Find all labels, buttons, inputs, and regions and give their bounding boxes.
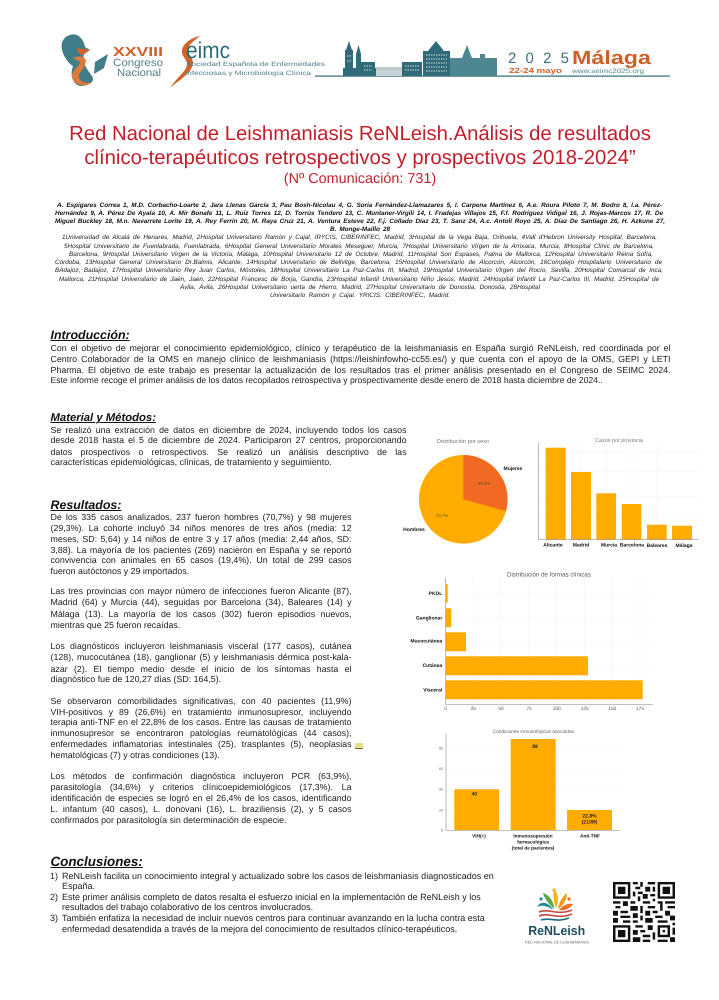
Málaga skyline xyxy=(315,41,670,77)
category labels xyxy=(410,591,443,693)
axis ticks: 20 xyxy=(439,808,443,812)
pie labels: 70.7% xyxy=(436,513,448,518)
text: resultados: diagnóstico fue de 120,27 días (SD: 164,5). xyxy=(50,674,221,684)
text: conclusiones: enfermedad desatendida a través de la mejora del conocimiento de resultados clínico-terapéuticos. xyxy=(62,924,457,934)
text: resultados: VIH-positivos y 89 (26,6%) en tratamiento inmunosupresor, incluyendo xyxy=(50,706,352,716)
congress name: Nacional xyxy=(117,67,161,79)
affiliations: 1Universidad de Alcalá de Henares, Madrid, 2Hospital Universitario Ramón y Cajal, IRYCIS, CIBERINFEC, Madrid, 3Hospital de la Vega Baja, Orihuela, 4Vall d'Hebron University Hospital, Barcelona, xyxy=(62,234,657,241)
text: conclusiones: ReNLeish facilita un conocimiento integral y actualizado sobre los casos de leishmaniasis diagnosticados en xyxy=(62,870,494,880)
logo: ReNLeish xyxy=(525,888,589,944)
text: introducción: Con el objetivo de mejorar el conocimiento epidemiológico, clínico y terapéutico de la leishmaniasis en España surgió ReNLeish, red coordinada por el xyxy=(50,343,670,353)
bar title: Casos por provincia xyxy=(595,438,643,444)
category labels: VIH(+) xyxy=(472,834,486,838)
text: material y métodos: desde 2018 hasta el 5 de diciembre de 2024. Participaron 27 centros, proporcionando xyxy=(50,435,406,445)
SEIMC name xyxy=(185,37,325,77)
authors list: A. Espigares Correa 1, M.D. Corbacho-Loarte 2, Jara Llenas García 3, Pau Bosh-Nicolau 4, G. Soria Fernández-Llamazares 5, I. Carpena Martínez 6, A.e. Roura Piloto 7, M. Bodro 8, I.a. Pérez- xyxy=(57,202,662,209)
axis ticks: 175 xyxy=(636,706,644,712)
text: resultados: Málaga (13). La mayoría de los casos (302) fueron episodios nuevos, xyxy=(50,608,352,618)
authors list: B. Monge-Maillo 28 xyxy=(330,226,390,233)
text: resultados: identificación de especies se logró en el 26,4% de los casos, identificando xyxy=(50,793,352,803)
text: resultados: inmunosupresor se encontraron patologías reumatológicas (44 casos), xyxy=(50,728,352,738)
authors list xyxy=(55,202,665,233)
chart: casos por provincia xyxy=(538,438,699,549)
text: resultados: confirmados por parasitología sin determinación de especie. xyxy=(50,815,286,825)
date and place: 2 0 2 5 xyxy=(508,50,569,67)
text: resultados: Los diagnósticos incluyeron leishmaniasis visceral (177 casos), cutánea xyxy=(50,641,352,651)
authors list: Miguel Buckley 18, M.n. Navarrete Lorite 19, A. Rey Ferrín 20, M. Raya Cruz 21, A. Ventura Esteve 22, F.j. Collado Díaz 23, T. Sanz 24, A.c. Antolí Royo 25, A. Díaz De Santiago 26, H. Azkune 27, xyxy=(55,218,665,225)
axis ticks: 150 xyxy=(608,706,617,712)
province labels: Madrid xyxy=(573,542,589,548)
title: Distribución de formas clínicas xyxy=(507,572,591,578)
province labels: Baleares xyxy=(647,543,668,549)
axis ticks: 100 xyxy=(553,706,561,712)
category labels: Mucocutánea xyxy=(410,638,443,644)
pie labels xyxy=(403,466,523,533)
authors list: Hernández 9, A. Pérez De Ayala 10, A. Mir Bonafe 11, L. Ruiz Torres 12, D. Torrús Tendero 13, C. Muntaner-Virgili 14, I. Fradejas Villajos 15, F.f. Rodríguez Vidigal 16, J. Rojas-Marcos 17, R. De xyxy=(55,210,663,217)
text: conclusiones: resultados del trabajo colaborativo de los centros involucrados. xyxy=(62,902,313,912)
heading: Introducción: Introducción: xyxy=(50,328,130,342)
affiliations: Barcelona, 9Hospital Universitario Virgen de la Victoria, Málaga, 10Hospital Universitario 12 de Octubre, Madrid, 11Hospital Son Espases, Palma de Mallorca, 12Hospital Universitario Reina Sofía, xyxy=(69,250,653,258)
text: material y métodos: datos prospectivos o retrospectivos. Se realizó un análisis descriptivo de las xyxy=(50,446,406,456)
date and place: Málaga xyxy=(572,48,652,69)
province labels xyxy=(543,542,693,549)
text: resultados: convivencia con animales en 65 casos (19,4%). Un total de 299 casos xyxy=(50,555,352,565)
title xyxy=(69,123,651,186)
province labels: Málaga xyxy=(676,543,693,549)
SEIMC name: Sociedad Española de Enfermedades xyxy=(186,61,325,68)
category labels: Ganglionar xyxy=(416,615,442,621)
pie slices xyxy=(419,455,508,544)
text: conclusiones: España. xyxy=(62,881,95,891)
text: introducción: Este informe recoge el primer análisis de los datos recopilados retrospectiva y prospectivamente desde enero de 2018 hasta diciembre de 2024.. xyxy=(50,375,603,385)
pie labels: Mujeres xyxy=(504,466,523,472)
text: material y métodos: características epidemiológicas, clínicas, de tratamiento y seguimiento. xyxy=(50,457,332,467)
category labels: Visceral xyxy=(423,687,443,693)
header banner xyxy=(62,34,670,88)
SEIMC name: eimc xyxy=(186,37,230,63)
text: conclusiones: 3) xyxy=(50,913,58,923)
bars xyxy=(446,584,643,699)
icon: small note xyxy=(355,743,363,749)
axis ticks: 125 xyxy=(581,706,589,712)
title: clínico-terapéuticos retrospectivos y prospectivos 2018-2024” xyxy=(84,147,636,169)
heading: Conclusiones: Conclusiones: xyxy=(50,854,143,869)
axis ticks: 0 xyxy=(441,828,443,832)
value labels: 22,8% xyxy=(582,814,597,820)
category labels: Cutánea xyxy=(423,663,443,669)
date and place: 22-24 mayo xyxy=(509,66,563,75)
axis ticks: 50 xyxy=(498,706,504,712)
bars xyxy=(546,448,692,540)
pie title: Distribución por sexo xyxy=(437,438,489,445)
QR code xyxy=(613,882,675,942)
congress name xyxy=(113,44,163,79)
text: resultados xyxy=(50,512,352,825)
category labels: farmacológica xyxy=(517,840,549,844)
value labels: 40 xyxy=(472,792,477,798)
text: resultados: Madrid (64) y Murcia (44), seguidas por Barcelona (34), Baleares (14) y xyxy=(50,597,352,607)
text: conclusiones: 1) xyxy=(50,870,58,880)
province labels: Alicante xyxy=(543,542,563,548)
text: conclusiones: 2) xyxy=(50,892,58,902)
category labels: Inmunosupresión xyxy=(513,834,553,838)
pie labels: 29.3% xyxy=(478,481,490,486)
logo wordmark: ReNLeish xyxy=(528,923,585,938)
title: Red Nacional de Leishmaniasis ReNLeish.Análisis de resultados xyxy=(69,123,651,145)
text: material y métodos xyxy=(50,424,406,467)
text: introducción xyxy=(50,343,670,385)
date and place xyxy=(508,48,652,75)
category labels: Anti-TNF xyxy=(580,834,600,838)
chart: distribución por sexo xyxy=(403,438,523,544)
axis ticks: 75 xyxy=(526,706,532,712)
heading: Material y Métodos: Material y Métodos: xyxy=(50,412,156,424)
category labels xyxy=(472,834,600,850)
text: resultados: terapia anti-TNF en el 22,8% de los casos. Entre las causas de tratamiento xyxy=(50,717,352,727)
heading: Resultados: Resultados: xyxy=(50,498,121,512)
text: resultados: meses, SD: 5,64) y 14 niños de entre 3 y 17 años (media: 2,44 años, SD: xyxy=(50,534,352,544)
title: (Nº Comunicación: 731) xyxy=(284,170,436,186)
pie labels: Hombres xyxy=(403,527,425,533)
text: resultados: Se observaron comorbilidades significativas, con 40 pacientes (11,9%) xyxy=(50,696,352,706)
congress logo: figure xyxy=(62,34,108,86)
title: Condiciones inmunológicas asociadas xyxy=(493,729,575,735)
value labels xyxy=(472,744,598,826)
text: resultados: fueron autóctonos y 29 importados. xyxy=(50,566,189,576)
affiliations xyxy=(55,234,663,298)
text: resultados: enfermedades inflamatorias intestinales (25), trasplantes (5), neoplasias xyxy=(50,739,352,749)
text: introducción: Centro Colaborador de la OMS en manejo clínico de leishmaniasis (https://leishinfowho-cc55.es/) y que cuenta con el apoyo de la OMS, GEPI y LETI xyxy=(50,354,670,364)
value labels: (21/89) xyxy=(582,820,598,826)
SEIMC logo mark xyxy=(170,36,200,88)
text: resultados: mientras que 25 fueron recaídas. xyxy=(50,620,180,630)
axis ticks: 0 xyxy=(444,706,447,712)
text: resultados: 3,88). La mayoría de los pacientes (269) nacieron en España y se reportó xyxy=(50,544,352,554)
affiliations: Córdoba, 13Hospital General Universitario Dr.Balmis, Alicante, 14Hospital Universitario de Bellvitge, Barcelona, 15Hospital Universitario de Alcorcón, Alcorcón, 16Complejo Hospitalario Universitario de xyxy=(55,259,662,266)
text: conclusiones xyxy=(50,870,494,934)
chart: distribución de formas clínicas xyxy=(410,572,653,712)
axis ticks: 40 xyxy=(439,787,443,791)
value labels: 89 xyxy=(532,744,538,750)
axis ticks xyxy=(444,706,644,712)
text: introducción: Pharma. El objetivo de este trabajo es presentar la actualización de los resultados tras el primer análisis presentado en el Congreso de SEIMC 2024. xyxy=(50,364,670,374)
affiliations: BAdajoz, Badajoz, 17Hospital Universitario Rey Juan Carlos, Móstoles, 18Hospital Universitario La Paz-Carlos III, Madrid, 19Hospital Universitario Virgen del Rocío, Sevilla, 20Hospital Comarcal de Inca, xyxy=(55,267,663,274)
date and place: www.seimc2025.org xyxy=(571,68,645,75)
affiliations: Universitario Ramón y Cajal. YRICIS. CIBERINFEC, Madrid. xyxy=(270,292,450,298)
axis ticks xyxy=(439,746,443,832)
waves xyxy=(539,910,572,920)
text: conclusiones: Este primer análisis completo de datos resalta el esfuerzo inicial en la implementación de ReNLeish y los xyxy=(62,892,481,902)
text: material y métodos: Se realizó una extracción de datos en diciembre de 2024, incluyendo todos los casos xyxy=(50,424,406,434)
province labels: Barcelona xyxy=(620,542,644,548)
text: conclusiones: También enfatiza la necesidad de incluir nuevos centros para continuar avanzando en la lucha contra esta xyxy=(62,913,485,923)
chart: condiciones inmunológicas asociadas xyxy=(439,729,620,850)
province labels: Murcia xyxy=(601,542,617,548)
axis ticks: 80 xyxy=(439,746,443,750)
affiliations: 5Hospital Universitario de Fuenlabrada, Fuenlabrada, 6Hospital General Universitario Morales Meseguer, Murcia, 7Hospital Universitario Virgen de la Arrixaca, Murcia, 8Hospital Clínic de Barcelona, xyxy=(64,242,654,250)
text: resultados: azar (2). El tiempo medio desde el inicio de los síntomas hasta el xyxy=(50,664,352,674)
text: resultados: (29,3%). La cohorte incluyó 34 niños menores de tres años (media: 12 xyxy=(50,523,352,533)
affiliations: Mallorca, 21Hospital Universitario de Jaén, Jaén, 22Hospital Francesc de Borja, Gandía, 23Hospital Infantil Universitario Niño Jesús, Madrid, 24Hospital Infantil La Paz-Carlos III, Madrid, 25Hospital de xyxy=(59,276,659,282)
text: resultados: De los 335 casos analizados, 237 fueron hombres (70,7%) y 98 mujeres xyxy=(50,512,352,522)
text: resultados: hematológicas (7) y otras condiciones (13). xyxy=(50,750,220,760)
category labels: (total de pacientes) xyxy=(512,846,555,850)
category labels: PKDL xyxy=(429,591,442,597)
text: resultados: L. infantum (40 casos), L. donovani (16), L. braziliensis (2), y 5 casos xyxy=(50,804,352,814)
axis ticks: 60 xyxy=(439,767,443,771)
affiliations: Ávila, Ávila, 26Hospital Universitario uerta de Hierro, Madrid, 27Hospital Universitario de Donostia, Donostia, 28Hospital xyxy=(180,284,540,290)
congress name: Congreso xyxy=(113,57,163,69)
axis ticks: 25 xyxy=(471,706,476,712)
congress name: XXVIII xyxy=(113,44,163,59)
text: resultados: parasitología (34,6%) y criterios clínicoepidemiológicos (17,3%). La xyxy=(50,782,352,792)
logo subtitle: RED NACIONAL DE LEISHMANIASIS xyxy=(525,940,589,944)
text: resultados: (128), mucocutánea (18), ganglionar (5) y leishmaniasis dérmica post-kala- xyxy=(50,652,352,662)
text: resultados: Los métodos de confirmación diagnóstica incluyeron PCR (63,9%), xyxy=(50,771,352,781)
fan figures xyxy=(537,888,573,910)
text: resultados: Las tres provincias con mayor número de infecciones fueron Alicante (87), xyxy=(50,586,352,596)
SEIMC name: Infecciosas y Microbiología Clínica xyxy=(185,70,312,77)
bars xyxy=(454,739,612,830)
